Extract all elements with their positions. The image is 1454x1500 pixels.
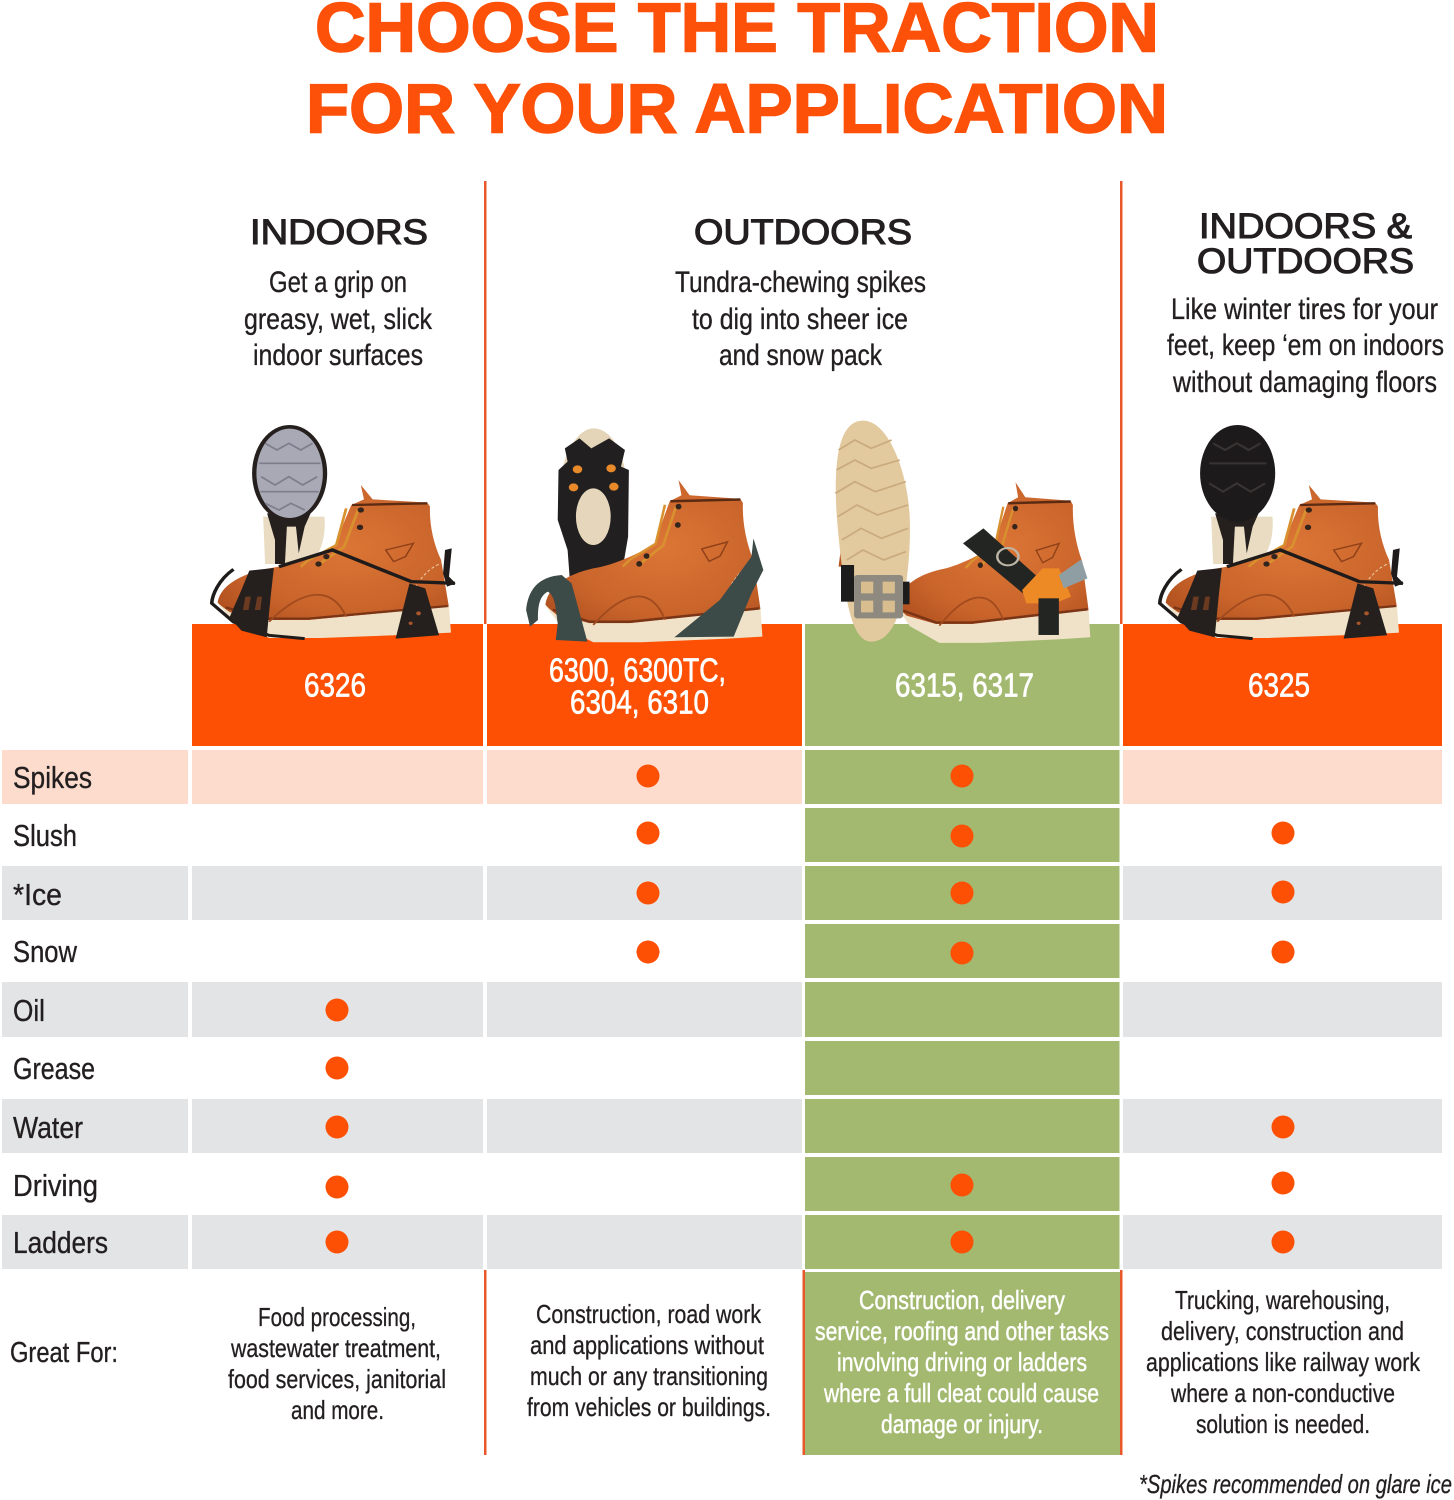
row: Spikes (2, 750, 1442, 804)
heading: indoors and outdoors: INDOORS & (1199, 207, 1412, 246)
row: Spikes: Spikes (13, 760, 92, 795)
heading: outdoors: Tundra-chewing spikes (675, 266, 926, 299)
title: FOR YOUR APPLICATION (306, 70, 1168, 148)
title (306, 0, 1168, 148)
row: Ice: *Ice (13, 877, 62, 912)
row: Slush: Slush (13, 818, 77, 853)
great for: 6300 series: much or any transitioning (530, 1361, 768, 1391)
row: Ladders (2, 1215, 1442, 1269)
great for: 6326: food services, janitorial (228, 1364, 446, 1394)
great for: 6325: Trucking, warehousing, (1175, 1285, 1390, 1315)
row: Water: Water (13, 1110, 83, 1145)
header cells with model numbers: 6304, 6310 (570, 684, 709, 720)
row: Snow: Snow (13, 934, 78, 969)
row: Ladders: Ladders (13, 1225, 108, 1260)
heading: indoors: greasy, wet, slick (244, 303, 433, 336)
boot: all-surface cleat 6325 (1160, 425, 1404, 639)
heading: outdoors: OUTDOORS (694, 213, 912, 252)
great for: 6315 series: where a full cleat could cause (823, 1378, 1099, 1408)
header cells with model numbers (192, 624, 1442, 746)
dots: 6300 series (636, 764, 660, 964)
heading: indoors (244, 213, 433, 372)
great for label: Great For: (10, 1337, 118, 1369)
row: Water (2, 1099, 1442, 1153)
header cells with model numbers: 6315, 6317 (895, 666, 1034, 704)
dots: 6326 (326, 998, 348, 1254)
great for: 6325: where a non-conductive (1170, 1378, 1395, 1408)
recommended column highlight (805, 750, 1120, 1269)
great for: 6326 (228, 1302, 446, 1425)
great for: 6300 series: from vehicles or buildings. (527, 1392, 771, 1422)
great for: 6315 series: Construction, delivery (859, 1285, 1065, 1315)
dots: 6315 series (950, 764, 974, 1254)
great for: 6315 series (802, 1270, 1122, 1455)
great for: 6300 series: and applications without (530, 1330, 765, 1360)
great for: 6326: and more. (291, 1395, 384, 1425)
heading: indoors and outdoors (1167, 207, 1444, 399)
great for: 6300 series (527, 1299, 771, 1422)
row: Oil (2, 982, 1442, 1037)
great for: 6325 (1146, 1285, 1421, 1439)
heading: indoors: INDOORS (250, 213, 428, 252)
heading: outdoors (675, 213, 926, 372)
row: Ice (2, 866, 1442, 920)
boot: indoor cleat 6326 (212, 425, 456, 639)
row: Grease: Grease (13, 1051, 95, 1086)
boot: outdoor spikes 6300 (526, 428, 763, 642)
great for: 6315 series: involving driving or ladders (837, 1347, 1087, 1377)
header cells with model numbers: 6300, 6300TC, (549, 652, 726, 688)
dots: 6325 (1272, 822, 1294, 1254)
row: Oil: Oil (13, 993, 45, 1028)
heading: outdoors: to dig into sheer ice (692, 303, 908, 336)
great for: 6326: Food processing, (258, 1302, 416, 1332)
header cells with model numbers: 6325 (1248, 666, 1310, 704)
heading: indoors: indoor surfaces (253, 339, 423, 372)
header cells with model numbers: 6326 (304, 666, 366, 704)
column dividers (484, 181, 1122, 1455)
great for: 6326: wastewater treatment, (230, 1333, 441, 1363)
great for: 6315 series: service, roofing and other tasks (815, 1316, 1109, 1346)
boot: mid-sole cleat 6315 (835, 421, 1090, 643)
great for: 6300 series: Construction, road work (536, 1299, 762, 1329)
heading: indoors and outdoors: OUTDOORS (1197, 242, 1414, 281)
great for: 6325: delivery, construction and (1161, 1316, 1404, 1346)
heading: outdoors: and snow pack (719, 339, 883, 372)
great for: 6325: solution is needed. (1196, 1409, 1370, 1439)
heading: indoors: Get a grip on (269, 266, 407, 299)
row: Driving: Driving (13, 1168, 98, 1203)
great for: 6315 series: damage or injury. (881, 1409, 1043, 1439)
